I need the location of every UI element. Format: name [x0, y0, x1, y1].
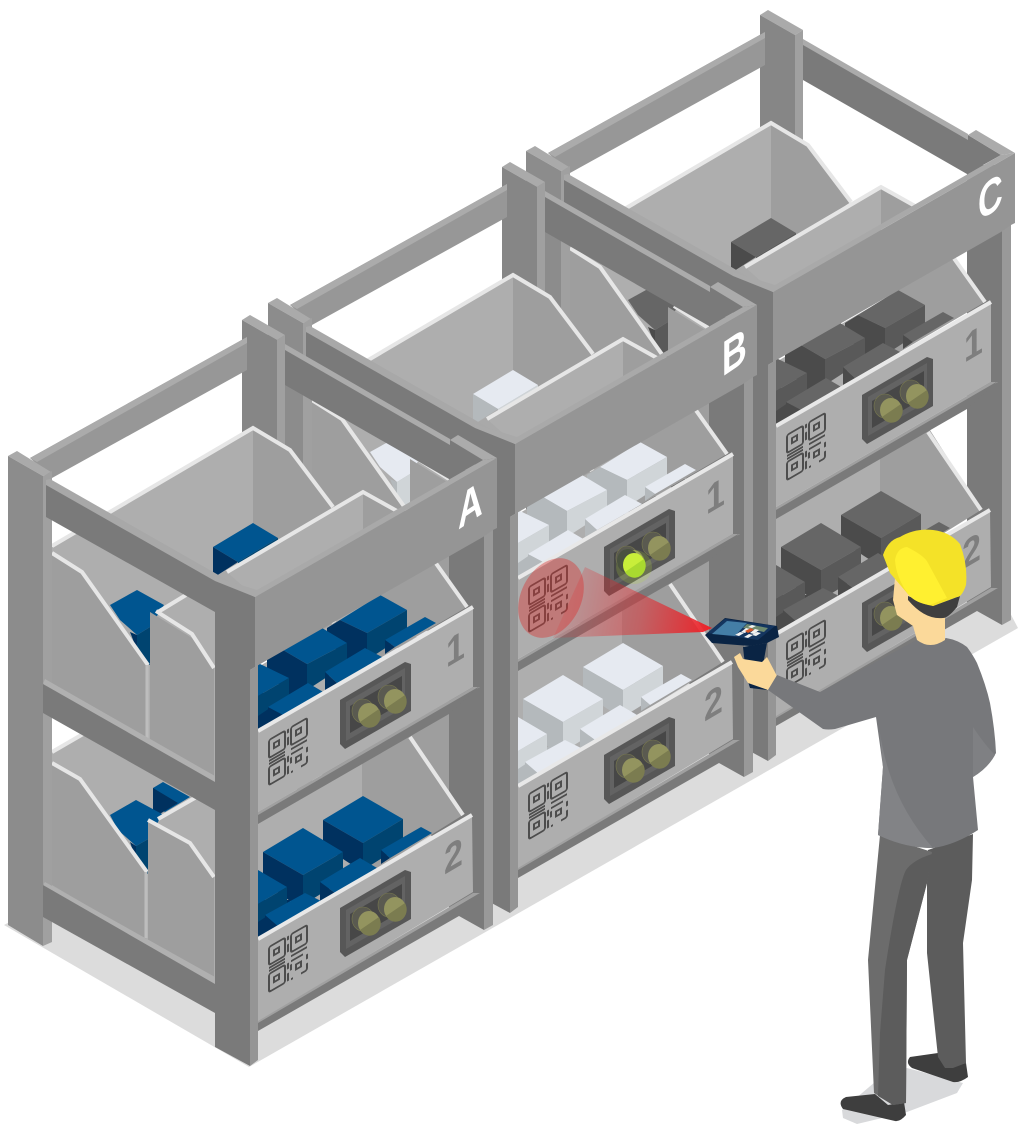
- worker: [705, 530, 996, 1121]
- rack C label: C: [978, 161, 1003, 233]
- bin C2 number: 2: [962, 524, 981, 579]
- hair: [908, 596, 960, 618]
- bin B1 lights: [604, 509, 675, 596]
- bin A2 lights: [340, 870, 411, 957]
- bin B1 number: 1: [706, 469, 725, 524]
- bin A1 lights: [340, 662, 411, 749]
- rack A label: A: [458, 469, 483, 541]
- bin C1 lights: [862, 357, 933, 444]
- bin A2 number: 2: [444, 829, 463, 884]
- rack B: [268, 162, 757, 913]
- bin B2 lights: [604, 717, 675, 804]
- rack A frame, bins and blue boxes: [8, 315, 497, 1066]
- bin C1 number: 1: [964, 317, 983, 372]
- worker shadow: [842, 1068, 963, 1124]
- rack C frame, bins and dark boxes: [526, 10, 1015, 761]
- hard hat: [883, 530, 966, 606]
- bin C2 lights: [862, 565, 933, 652]
- red scan target on QR code: [505, 547, 597, 649]
- handheld scanner handle: [743, 643, 767, 690]
- rack A: [8, 315, 497, 1066]
- shoes: [841, 1053, 968, 1121]
- bin A1 number: 1: [446, 622, 465, 677]
- sleeve shading: [973, 727, 995, 777]
- red scan beam: [553, 567, 712, 638]
- floor shadow: [4, 590, 1018, 1067]
- rack C: [526, 10, 1015, 761]
- trousers: [868, 834, 973, 1105]
- shirt: [768, 638, 996, 848]
- rack B frame, bins and white boxes: [268, 162, 757, 913]
- bin B2 number: 2: [704, 676, 723, 731]
- shirt shading: [878, 733, 933, 848]
- rack B label: B: [722, 316, 747, 388]
- face and neck: [893, 578, 945, 645]
- lit green button: [616, 549, 652, 584]
- handheld scanner: [705, 618, 779, 646]
- hand: [734, 653, 777, 690]
